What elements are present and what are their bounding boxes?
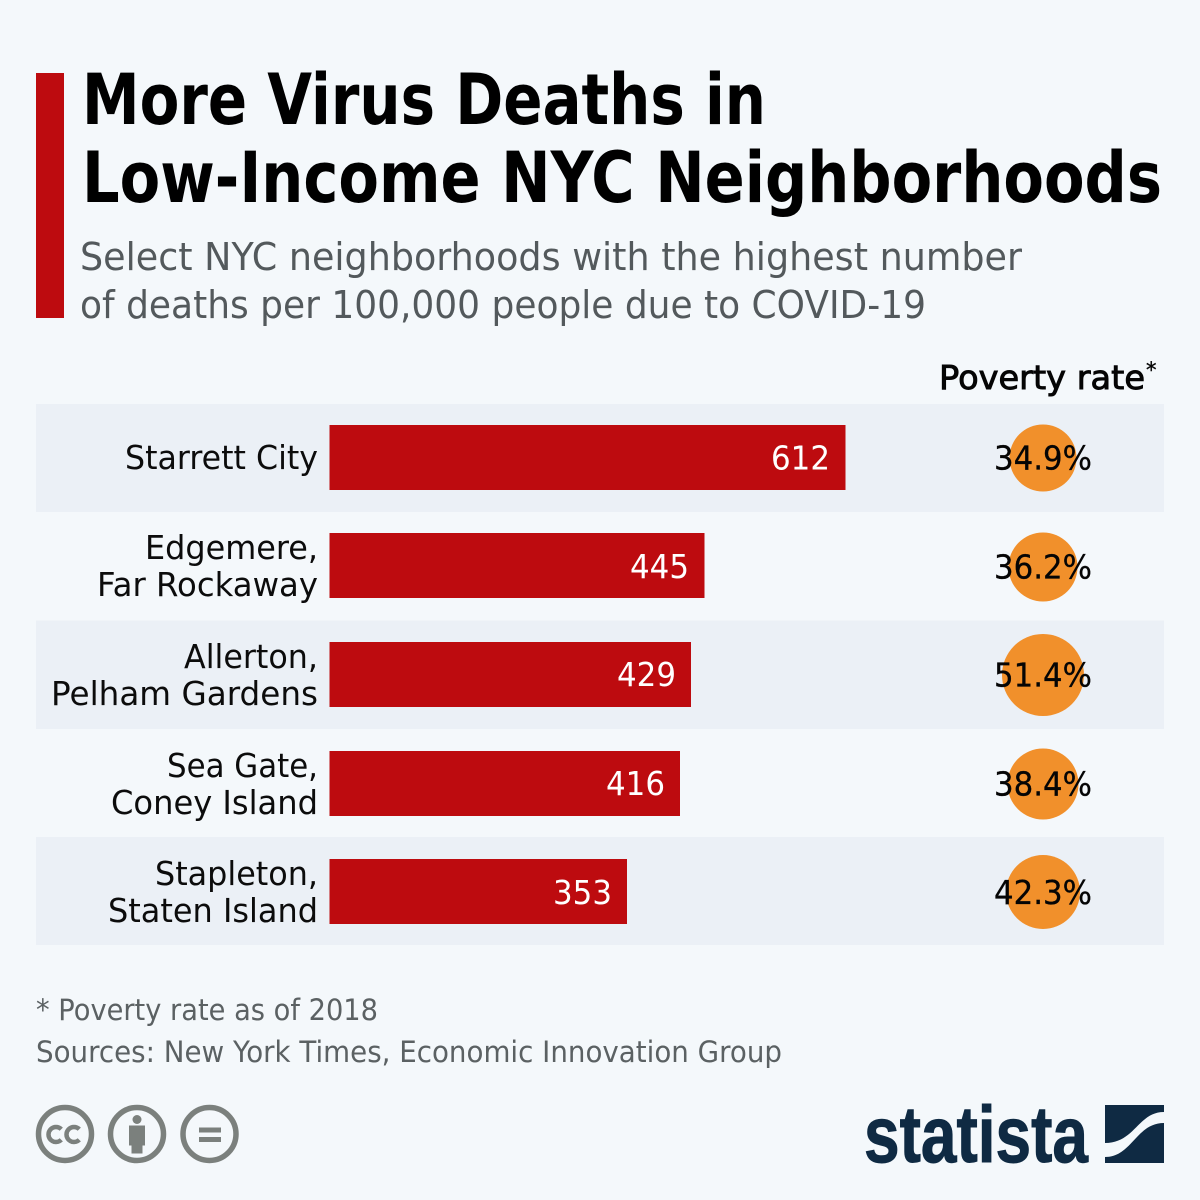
label: Edgemere, Far Rockaway xyxy=(97,528,318,604)
poverty bubble: 42.3% xyxy=(1006,855,1080,929)
subtitle xyxy=(80,235,1022,327)
label: Edgemere, Far Rockaway: Far Rockaway xyxy=(97,565,318,604)
icon: creative commons xyxy=(38,1108,92,1160)
statista logo xyxy=(864,1090,1164,1179)
bar: 429 xyxy=(330,642,691,707)
label: Sea Gate, Coney Island: Sea Gate, xyxy=(167,746,318,785)
value: 353: 353 xyxy=(553,873,612,912)
icon: attribution xyxy=(110,1108,164,1160)
row: Sea Gate, Coney Island xyxy=(111,746,1092,822)
value: 416: 416 xyxy=(606,764,665,803)
poverty bubble: 34.9% xyxy=(1010,424,1076,492)
row: Allerton, Pelham Gardens xyxy=(36,620,1164,729)
subtitle: of deaths per 100,000 people due to COVID-19 xyxy=(80,283,926,327)
label: Sea Gate, Coney Island xyxy=(111,746,318,822)
poverty bubble: 36.2% xyxy=(1008,532,1078,602)
poverty value: 51.4%: 51.4% xyxy=(994,656,1092,694)
title xyxy=(82,59,1162,219)
value: 612: 612 xyxy=(771,438,830,478)
row: Edgemere, Far Rockaway xyxy=(97,528,1092,604)
label: Stapleton, Staten Island: Stapleton, xyxy=(155,854,318,893)
poverty bubble: 51.4% xyxy=(1002,634,1084,716)
value: 429: 429 xyxy=(617,655,676,694)
poverty value: 42.3%: 42.3% xyxy=(994,873,1092,912)
bar: 353 xyxy=(330,859,627,924)
column heading: poverty rate: * xyxy=(1146,358,1156,382)
subtitle: Select NYC neighborhoods with the highest number xyxy=(80,235,1022,279)
bar: 416 xyxy=(330,751,680,816)
label: Edgemere, Far Rockaway: Edgemere, xyxy=(145,528,318,567)
label: Stapleton, Staten Island: Staten Island xyxy=(108,891,318,930)
bar: 445 xyxy=(330,533,704,598)
footnote: * Poverty rate as of 2018 xyxy=(36,993,378,1027)
poverty value: 38.4%: 38.4% xyxy=(994,764,1092,804)
label: Sea Gate, Coney Island: Coney Island xyxy=(111,783,318,822)
poverty value: 34.9%: 34.9% xyxy=(994,438,1092,478)
poverty value: 36.2%: 36.2% xyxy=(994,548,1092,586)
bar: 612 xyxy=(330,425,846,490)
icon: no derivatives xyxy=(183,1108,236,1160)
title accent bar xyxy=(36,73,64,318)
label: Allerton, Pelham Gardens xyxy=(51,637,318,713)
poverty bubble: 38.4% xyxy=(1008,748,1078,820)
column heading: poverty rate: Poverty rate xyxy=(939,358,1145,397)
sources: Sources: New York Times, Economic Innovation Group xyxy=(36,1035,782,1069)
label: Starrett City: Starrett City xyxy=(125,438,318,477)
logo mark xyxy=(1105,1105,1164,1163)
value: 445: 445 xyxy=(630,547,689,586)
label: Stapleton, Staten Island xyxy=(108,854,318,930)
title: More Virus Deaths in xyxy=(82,59,766,141)
logo wordmark: statista xyxy=(864,1090,1088,1179)
label: Allerton, Pelham Gardens: Pelham Gardens xyxy=(51,674,318,713)
row: Starrett City xyxy=(36,404,1164,512)
row: Stapleton, Staten Island xyxy=(36,837,1164,945)
label: Allerton, Pelham Gardens: Allerton, xyxy=(184,637,318,676)
